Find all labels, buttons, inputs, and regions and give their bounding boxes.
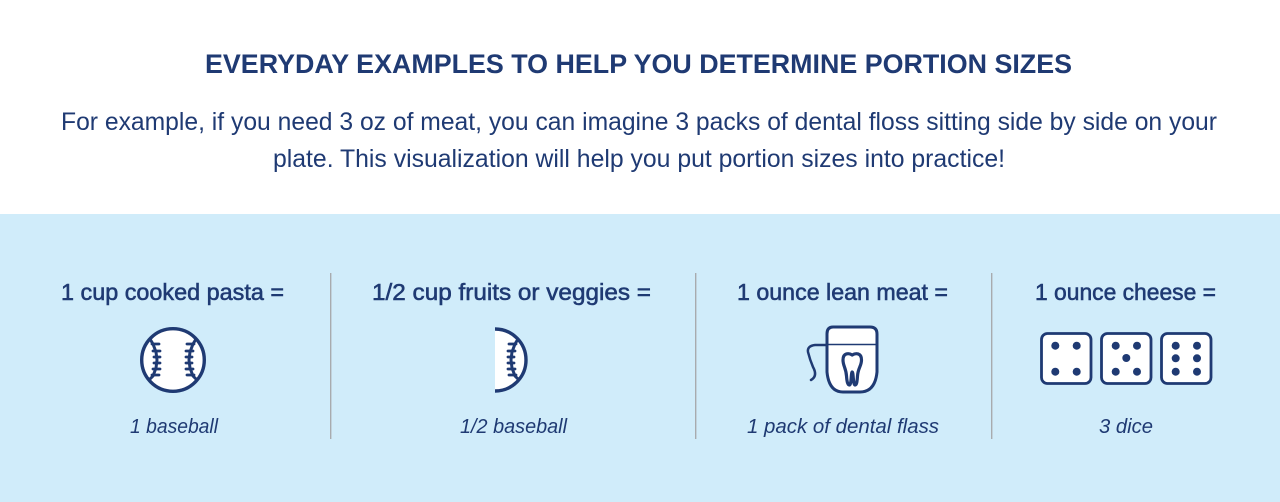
caption: 1 baseball: 1 baseball [130, 416, 219, 438]
intro paragraph: For example, if you need 3 oz of meat, you can imagine 3 packs of dental floss sitting side by side on your [61, 108, 1217, 136]
intro paragraph [61, 108, 1217, 173]
label: 1 ounce lean meat: 1 ounce lean meat = [737, 279, 948, 305]
caption: 3 dice: 3 dice [1099, 416, 1153, 438]
example: fruits or veggies [372, 279, 651, 438]
example: cheese [1035, 279, 1216, 438]
example: pasta [61, 279, 284, 438]
intro paragraph: plate. This visualization will help you put portion sizes into practice! [273, 145, 1005, 173]
label: 1/2 cup fruits or veggies: 1/2 cup fruits or veggies = [372, 279, 651, 305]
icon: three dice [1042, 334, 1211, 384]
caption: 1/2 baseball: 1/2 baseball [460, 416, 568, 438]
example: lean meat [737, 279, 948, 438]
caption: 1 pack of dental flass: 1 pack of dental flass [747, 416, 939, 438]
icon: dental floss pack [808, 327, 877, 392]
title: EVERYDAY EXAMPLES TO HELP YOU DETERMINE PORTION SIZES [205, 49, 1072, 79]
icon: baseball [142, 329, 204, 391]
icon: half baseball [495, 329, 526, 391]
label: 1 ounce cheese: 1 ounce cheese = [1035, 279, 1216, 305]
panel: portion examples [0, 214, 1280, 502]
label: 1 cup cooked pasta: 1 cup cooked pasta = [61, 279, 284, 305]
